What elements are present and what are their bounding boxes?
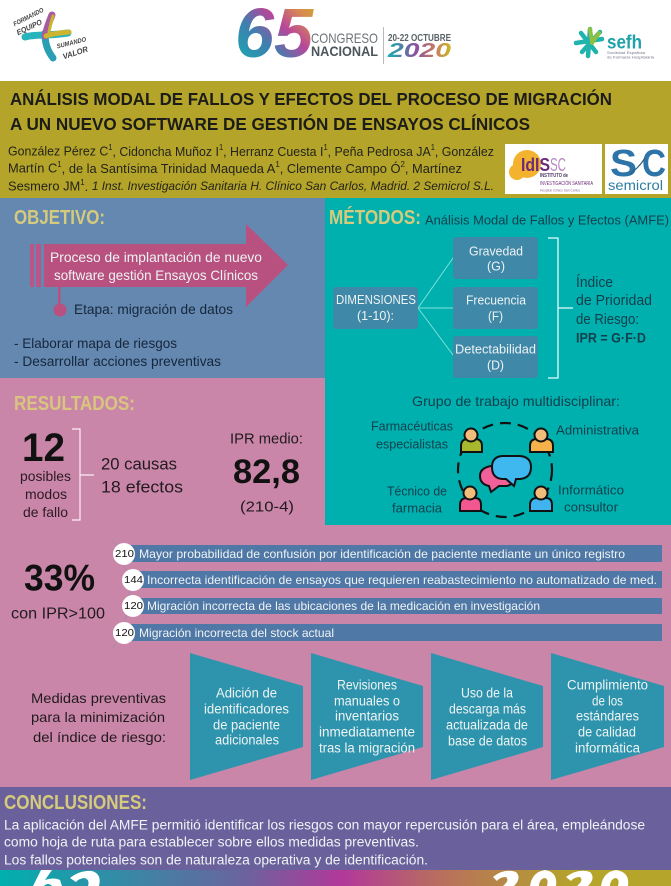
measure 4: de calidad — [578, 724, 636, 740]
logo: semicrol: semicrol — [608, 177, 663, 193]
box: gravedad: (G) — [487, 258, 505, 274]
box: gravedad — [453, 237, 538, 279]
panel: conclusiones — [0, 787, 671, 870]
measure 2: tras la migración — [319, 740, 415, 756]
box: dimensiones — [333, 287, 418, 329]
authors: , Herranz Cuesta I — [223, 144, 323, 158]
authors: González Pérez C — [8, 144, 114, 158]
team labels: farmacia — [392, 500, 443, 516]
title — [10, 88, 612, 134]
risk item 144: Incorrecta identificación de ensayos que requieren reabastecimiento no automatizado de med. — [147, 573, 657, 587]
box: frecuencia: (F) — [488, 308, 503, 324]
arrow: implantation process — [30, 224, 288, 307]
title: A UN NUEVO SOFTWARE DE GESTIÓN DE ENSAYOS CLÍNICOS — [10, 113, 530, 134]
authors: , Peña Pedrosa JA — [328, 144, 431, 158]
authors — [8, 142, 494, 194]
logo: formando equipo sumando valor: FORMANDO — [12, 7, 45, 28]
logo: formando equipo sumando valor: SUMANDO — [56, 36, 87, 50]
logo: 65 congreso nacional: 20-22 OCTUBRE — [388, 32, 451, 44]
heading: métodos: Análisis Modal de Fallos y Efectos (AMFE) — [425, 212, 669, 228]
team diagram — [458, 423, 553, 517]
footer band — [0, 870, 671, 886]
title: ANÁLISIS MODAL DE FALLOS Y EFECTOS DEL PROCESO DE MIGRACIÓN — [10, 88, 612, 109]
measure 1: de paciente — [213, 718, 280, 732]
icon: person green — [461, 428, 482, 452]
arrow: implantation process: Proceso de implantación de nuevo — [50, 249, 262, 265]
authors: , de la Santísima Trinidad Maqueda A — [62, 160, 276, 176]
authors: 1 — [57, 160, 62, 168]
measure 4: estándares — [576, 708, 639, 724]
box: frecuencia: Frecuencia — [466, 292, 527, 308]
authors: 1 — [219, 142, 224, 152]
IPR formula: IPR = G·F·D — [576, 330, 646, 346]
preventive measures label: del índice de riesgo: — [33, 729, 166, 745]
preventive measures label: para la minimización — [31, 709, 165, 725]
stat: 33%: con IPR>100 — [11, 606, 105, 622]
team labels: consultor — [564, 500, 619, 514]
box: dimensiones: DIMENSIONES — [336, 293, 416, 307]
authors: 1 — [108, 142, 113, 152]
header band — [0, 0, 671, 81]
logo: 65 congreso nacional: CONGRESO — [311, 30, 378, 46]
measure 4: de los — [592, 694, 623, 708]
heading: métodos: MÉTODOS: — [329, 206, 421, 229]
stat: 12 failure modes — [20, 426, 71, 520]
box: detectabilidad: Detectabilidad — [455, 342, 536, 356]
logo: 65 congreso nacional: 2020 — [387, 40, 451, 62]
measure 4: Cumplimiento — [567, 678, 648, 692]
marker: etapa migración: Etapa: migración de datos — [74, 301, 233, 317]
icon: chat bubbles — [480, 456, 531, 492]
measure 4: informática — [575, 740, 640, 756]
title band — [0, 81, 671, 198]
connectors — [418, 258, 453, 355]
authors: Sesmero JM — [8, 178, 81, 194]
dashed ring — [458, 423, 552, 517]
authors: , Clemente Campo Ó — [280, 160, 400, 176]
causes and effects — [101, 454, 183, 496]
measure 3: Uso de la — [461, 686, 513, 700]
logo: 65 congreso nacional: NACIONAL — [311, 43, 378, 59]
logo: formando equipo sumando valor: EQUIPO — [15, 17, 43, 37]
logo: sefh: Sociedad Española — [607, 50, 646, 55]
logo: IdISSC: INVESTIGACIÓN SANITARIA — [540, 180, 594, 187]
logo: sefh: de Farmacia Hospitalaria — [607, 54, 655, 60]
decorative white brush marks — [33, 870, 100, 886]
panel: métodos — [325, 198, 671, 525]
measure 1: adicionales — [215, 732, 279, 748]
IPR formula: de Prioridad — [576, 293, 652, 309]
measure 2: inventarios — [335, 708, 399, 724]
heading: grupo de trabajo: Grupo de trabajo multidisciplinar: — [412, 393, 620, 409]
measure 4 — [551, 653, 664, 780]
causes and effects: 18 efectos — [101, 478, 183, 496]
heading: resultados: RESULTADOS: — [14, 393, 135, 415]
team labels — [371, 418, 640, 516]
bracket — [72, 429, 94, 520]
icon: person orange — [530, 428, 553, 452]
logo: formando equipo sumando valor: VALOR — [62, 45, 89, 61]
stat: 12 failure modes: 12 — [22, 426, 65, 470]
risk list — [113, 543, 662, 644]
team labels: especialistas — [376, 436, 448, 452]
logo: semicrol: S — [610, 143, 637, 185]
authors: , Cidoncha Muñoz I — [112, 144, 219, 158]
logo: IdISSC: Hospital Clínico San Carlos — [540, 188, 580, 192]
risk item 210: Mayor probabilidad de confusión por identificación de paciente mediante un único registro — [139, 547, 625, 561]
logo: semicrol — [605, 143, 668, 194]
logo: 65 congreso nacional — [235, 0, 451, 72]
authors: 1 — [275, 160, 280, 168]
conclusions text — [4, 818, 645, 868]
measure 2: manuales o — [334, 694, 400, 708]
risk item 144: 144 — [124, 574, 143, 586]
authors: 1 — [431, 142, 435, 152]
risk item 120: 120 — [124, 600, 143, 612]
measure 1: Adición de — [216, 686, 277, 700]
logo: IdISSC: IdIS — [521, 155, 550, 175]
conclusions text: como hoja de ruta para establecer sobre ellos medidas preventivas. — [4, 834, 419, 850]
measure 3 — [431, 653, 543, 780]
heading: objetivo: OBJETIVO: — [14, 207, 105, 229]
authors: 1 — [323, 142, 328, 152]
box: detectabilidad: (D) — [487, 358, 504, 372]
authors: , González — [435, 144, 494, 158]
stat: IPR medio — [230, 430, 303, 516]
authors: 1 — [80, 178, 85, 186]
IPR formula: Índice — [576, 274, 613, 291]
measure 1: identificadores — [204, 702, 289, 716]
arc connector — [113, 540, 129, 648]
objective list — [14, 335, 221, 369]
measure 2: inmediatamente — [319, 724, 415, 740]
marker: etapa migración — [54, 287, 233, 317]
stat: IPR medio: (210-4) — [240, 498, 294, 516]
measure 3: actualizada de — [446, 718, 528, 732]
bracket — [548, 238, 573, 378]
risk item 120 stock: 120 — [115, 627, 134, 639]
objective list: - Elaborar mapa de riesgos — [14, 335, 177, 351]
stat: 33% — [11, 558, 105, 622]
preventive measures label — [31, 690, 166, 745]
box: dimensiones: (1-10): — [357, 309, 394, 323]
risk item 210 — [113, 543, 662, 565]
stat: IPR medio: 82,8 — [233, 453, 300, 491]
heading: conclusiones: CONCLUSIONES: — [4, 792, 147, 814]
stat: 33%: 33% — [24, 558, 95, 598]
IPR formula — [576, 274, 652, 346]
logo: IdISSC: SC — [550, 155, 566, 175]
preventive measures label: Medidas preventivas — [31, 690, 166, 706]
authors: 1 Inst. Investigación Sanitaria H. Clínico San Carlos, Madrid. 2 Semicrol S.L. — [92, 179, 494, 193]
authors: 2 — [400, 160, 405, 168]
icon: person pink — [460, 486, 481, 511]
stat: IPR medio: IPR medio: — [230, 430, 303, 448]
causes and effects: 20 causas — [101, 454, 177, 474]
risk item 210: 210 — [115, 548, 134, 560]
measure 2 — [311, 653, 423, 780]
measure 1 — [190, 653, 303, 780]
conclusions text: Los fallos potenciales son de naturaleza operativa y de identificación. — [4, 852, 428, 868]
team labels: Informático — [558, 482, 624, 498]
conclusions text: La aplicación del AMFE permitió identificar los riesgos con mayor repercusión para el área, empleándose — [4, 818, 645, 832]
measure 2: Revisiones — [337, 678, 397, 692]
logo: semicrol: C — [642, 143, 666, 185]
arrow: implantation process: software gestión Ensayos Clínicos — [54, 267, 258, 283]
risk item 120: Migración incorrecta de las ubicaciones de la medicación en investigación — [147, 599, 540, 613]
stat: 12 failure modes: modos — [25, 486, 67, 502]
risk item 120 stock: Migración incorrecta del stock actual — [139, 626, 334, 640]
objective list: - Desarrollar acciones preventivas — [14, 353, 221, 369]
authors: . — [85, 178, 92, 194]
stat: 12 failure modes: posibles — [20, 468, 71, 484]
logo: IdISSC — [505, 144, 602, 194]
stat: 12 failure modes: de fallo — [23, 504, 68, 520]
box: detectabilidad — [453, 336, 538, 378]
risk item 144 — [122, 569, 662, 591]
authors: , Martínez — [405, 160, 462, 176]
heading: métodos — [329, 206, 669, 229]
risk item 120 stock — [113, 622, 662, 644]
box: frecuencia — [453, 287, 538, 329]
measure 3: descarga más — [449, 702, 526, 716]
panel: objetivo — [0, 198, 325, 378]
team labels: Técnico de — [387, 484, 447, 498]
risk item 120 — [122, 595, 662, 617]
panel: resultados — [0, 378, 671, 787]
logo: sefh: sefh — [607, 32, 642, 54]
team labels: Farmacéuticas — [371, 418, 453, 434]
logo: IdISSC: INSTITUTO de — [540, 173, 568, 179]
authors: Martín C — [8, 160, 58, 176]
team labels: Administrativa — [556, 422, 640, 438]
icon: person blue — [530, 486, 552, 511]
IPR formula: de Riesgo: — [576, 312, 639, 328]
logo: formando equipo sumando valor — [12, 7, 89, 61]
measure 3: base de datos — [448, 734, 527, 748]
box: gravedad: Gravedad — [469, 244, 523, 258]
logo: sefh — [576, 29, 655, 60]
